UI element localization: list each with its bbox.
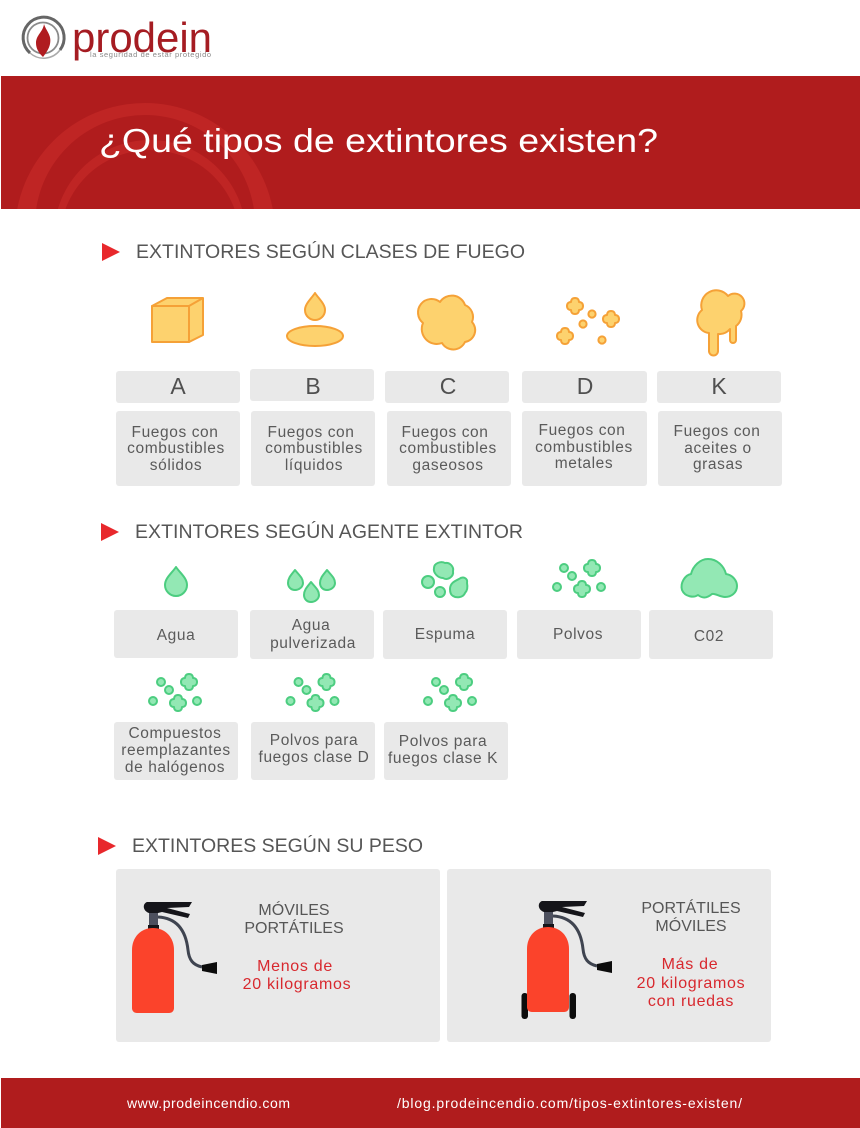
label: Compuestos reemplazantes de halógenos: reemplazantes xyxy=(121,742,231,759)
label: C02: C02 xyxy=(694,628,724,645)
description: B: combustibles xyxy=(265,440,363,457)
label: Agua pulverizada: pulverizada xyxy=(270,635,356,652)
label: Espuma: Espuma xyxy=(415,626,475,643)
description: C xyxy=(387,411,511,486)
description: A xyxy=(116,411,240,486)
panel: móviles portátiles: PORTÁTILES xyxy=(244,918,344,937)
description: K: aceites o xyxy=(684,440,752,457)
footer xyxy=(1,1078,860,1128)
description: C: gaseosos xyxy=(412,457,484,474)
description: B xyxy=(251,411,375,486)
tag: B: B xyxy=(305,373,321,399)
label: Polvos para fuegos clase K xyxy=(384,722,508,780)
label: Polvos: Polvos xyxy=(553,626,603,643)
header banner xyxy=(1,76,860,209)
icon: powder, class D xyxy=(286,674,338,711)
label: Compuestos reemplazantes de halógenos xyxy=(114,722,238,780)
description: A: combustibles xyxy=(127,440,225,457)
section heading: clases de fuego: EXTINTORES SEGÚN CLASES DE FUEGO xyxy=(136,240,525,263)
label: Agua xyxy=(114,610,238,658)
label: Polvos para fuegos clase D: fuegos clase D xyxy=(259,749,369,766)
icon: powder xyxy=(553,560,605,597)
description: C: combustibles xyxy=(399,440,497,457)
panel: portátiles móviles: Más de xyxy=(662,956,718,973)
description: B: líquidos xyxy=(285,457,343,474)
logo: prodein: prodein xyxy=(72,14,212,61)
section heading: agente extintor: EXTINTORES SEGÚN AGENTE EXTINTOR xyxy=(135,520,523,543)
label: Compuestos reemplazantes de halógenos: Compuestos xyxy=(128,725,222,742)
icon: metal particles xyxy=(557,298,619,344)
label: Polvos para fuegos clase D xyxy=(251,722,375,780)
icon: gas cloud xyxy=(418,296,475,349)
logo: prodein: la seguridad de estar protegido xyxy=(90,50,211,59)
label: Compuestos reemplazantes de halógenos: de halógenos xyxy=(125,759,225,776)
description: A: Fuegos con xyxy=(132,424,218,441)
panel: móviles portátiles: MÓVILES xyxy=(258,900,330,919)
title: ¿Qué tipos de extintores existen? xyxy=(99,122,658,159)
icon: water spray xyxy=(288,570,335,602)
panel: portátiles móviles: 20 kilogramos xyxy=(637,975,745,992)
panel: portátiles móviles: PORTÁTILES xyxy=(641,898,741,917)
tag: D xyxy=(522,371,647,403)
label: Agua pulverizada: Agua xyxy=(292,617,330,634)
description: D: Fuegos con xyxy=(538,422,626,439)
label: Agua pulverizada xyxy=(250,610,374,659)
tag: D: D xyxy=(577,373,593,399)
footer: www.prodeincendio.com xyxy=(126,1095,290,1111)
tag: A: A xyxy=(170,373,186,399)
label: Polvos para fuegos clase K: fuegos clase K xyxy=(388,750,498,767)
tag: C xyxy=(385,371,509,403)
section heading: peso: EXTINTORES SEGÚN SU PESO xyxy=(132,834,423,857)
icon: extinguisher xyxy=(132,902,217,1013)
icon: liquid drop xyxy=(287,293,343,346)
tag: B xyxy=(250,369,374,401)
footer: /blog.prodeincendio.com/tipos-extintores-existen/ xyxy=(397,1095,742,1111)
panel: portátiles móviles: con ruedas xyxy=(648,993,734,1010)
description: K xyxy=(658,411,782,486)
icon: powder, class K xyxy=(424,674,476,711)
label: Polvos para fuegos clase K: Polvos para xyxy=(399,733,487,750)
description: K: grasas xyxy=(693,456,743,473)
description: B: Fuegos con xyxy=(268,424,354,441)
panel: portátiles móviles: MÓVILES xyxy=(655,916,727,935)
tag: C: C xyxy=(440,373,456,399)
icon: cube xyxy=(152,298,203,342)
panel: móviles portátiles: Menos de xyxy=(257,958,333,975)
label: Polvos para fuegos clase D: Polvos para xyxy=(270,732,358,749)
icon: grease blob xyxy=(697,290,744,356)
panel: portátiles móviles xyxy=(447,869,771,1042)
description: K: Fuegos con xyxy=(674,423,760,440)
icon: water drop xyxy=(165,567,187,596)
icon: extinguisher with wheels xyxy=(522,901,612,1019)
description: D: combustibles xyxy=(535,439,633,456)
icon: powder, halogen compounds xyxy=(149,674,201,711)
tag: K: K xyxy=(711,373,727,399)
description: D xyxy=(522,411,647,486)
tag: K xyxy=(657,371,781,403)
icon: CO2 cloud xyxy=(682,559,737,598)
panel: móviles portátiles: 20 kilogramos xyxy=(243,976,351,993)
label: Espuma xyxy=(383,610,507,659)
label: Polvos xyxy=(517,610,641,659)
description: D: metales xyxy=(555,455,613,472)
tag: A xyxy=(116,371,240,403)
icon: foam xyxy=(422,562,467,597)
panel: móviles portátiles xyxy=(116,869,440,1042)
description: C: Fuegos con xyxy=(402,424,488,441)
label: Agua: Agua xyxy=(157,627,195,644)
label: C02 xyxy=(649,610,773,659)
description: A: sólidos xyxy=(150,457,202,474)
